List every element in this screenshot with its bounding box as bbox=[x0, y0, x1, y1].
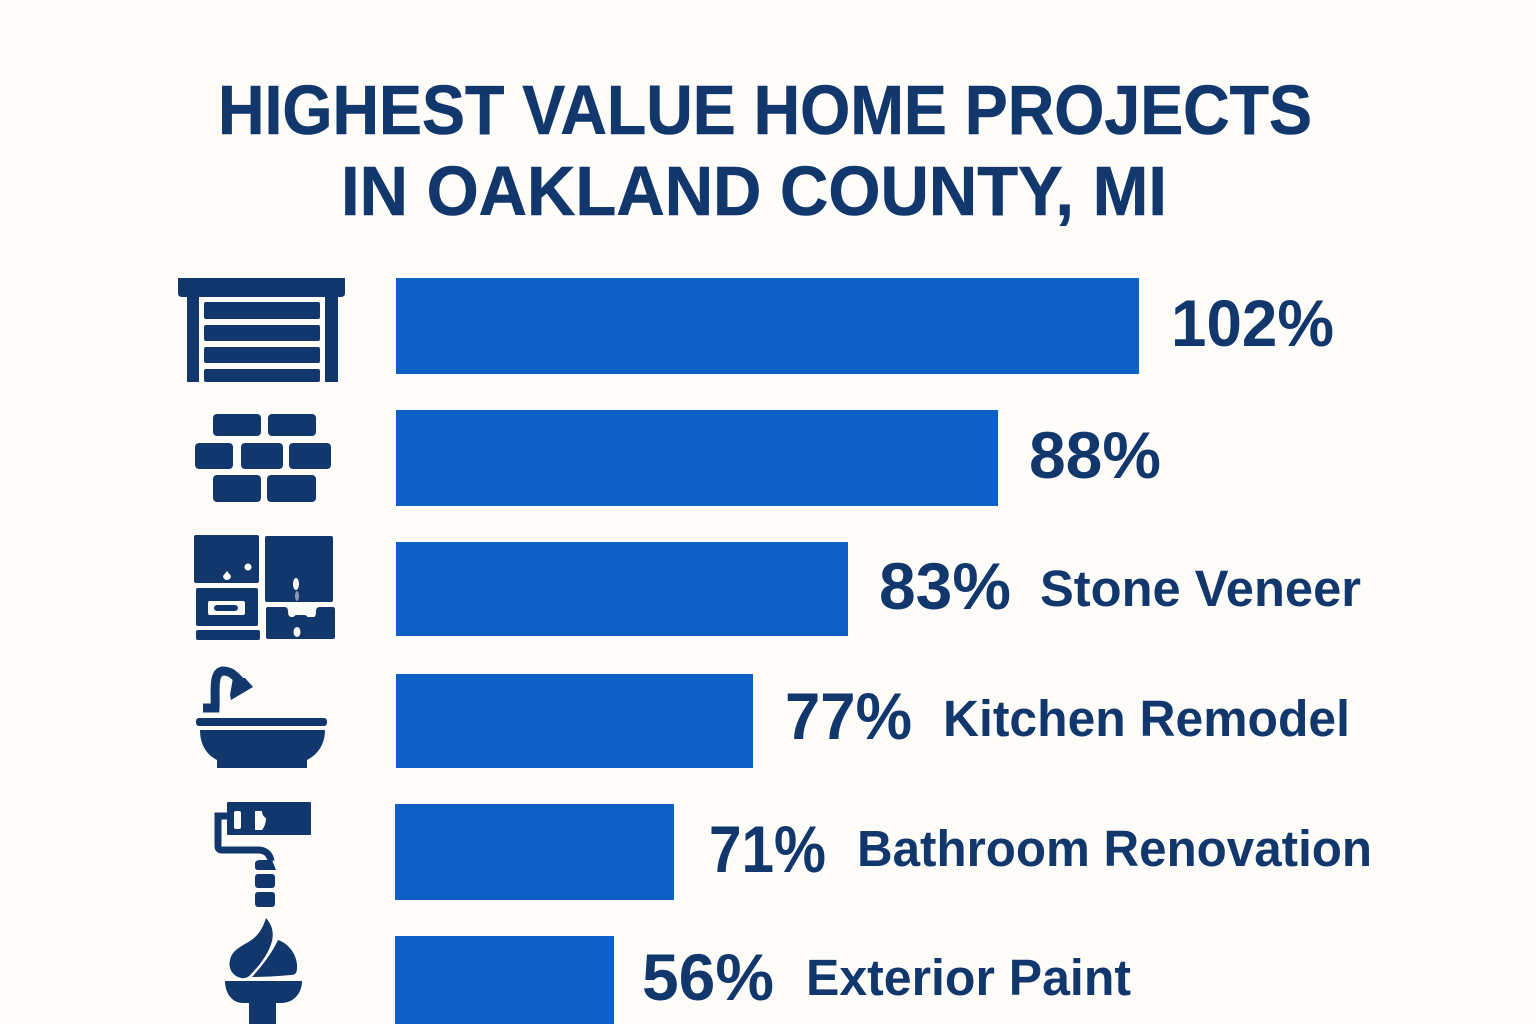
icon: bricks bbox=[195, 414, 331, 502]
value: 83%: 83% bbox=[879, 549, 1011, 623]
label: Kitchen Remodel: Kitchen Remodel bbox=[943, 690, 1350, 747]
label: Bathroom Renovation: Bathroom Renovation bbox=[857, 820, 1372, 877]
row: exterior paint 56% bbox=[225, 918, 1131, 1024]
icon: garage door bbox=[178, 278, 345, 382]
row: bricks 88% bbox=[195, 410, 1161, 506]
row: kitchen remodel 77% bbox=[196, 671, 1350, 768]
icon: sink and faucet bbox=[196, 671, 327, 768]
label: Exterior Paint: Exterior Paint bbox=[806, 949, 1131, 1006]
bar: 71% bbox=[395, 804, 674, 900]
title: IN OAKLAND COUNTY, MI bbox=[341, 152, 1167, 230]
bar: 88% bbox=[396, 410, 998, 506]
row: garage door 102% bbox=[178, 278, 1334, 382]
bar: 77% bbox=[396, 674, 753, 768]
value: 56%: 56% bbox=[642, 940, 774, 1014]
value: 102%: 102% bbox=[1171, 286, 1334, 360]
bar: 56% bbox=[395, 936, 614, 1024]
bar: 102% bbox=[396, 278, 1139, 374]
bar: 83% bbox=[396, 542, 848, 636]
icon: paint roller bbox=[218, 802, 311, 907]
title: HIGHEST VALUE HOME PROJECTS bbox=[218, 71, 1312, 149]
row: bathroom renovation 71% bbox=[218, 802, 1372, 907]
value: 77%: 77% bbox=[785, 679, 912, 753]
value: 88%: 88% bbox=[1029, 418, 1161, 492]
value: 71%: 71% bbox=[709, 812, 826, 886]
title bbox=[218, 71, 1312, 230]
icon: torch bbox=[225, 918, 302, 1024]
label: Stone Veneer: Stone Veneer bbox=[1040, 560, 1361, 617]
row: stone veneer 83% bbox=[194, 535, 1361, 640]
icon: cabinets bbox=[194, 535, 335, 640]
